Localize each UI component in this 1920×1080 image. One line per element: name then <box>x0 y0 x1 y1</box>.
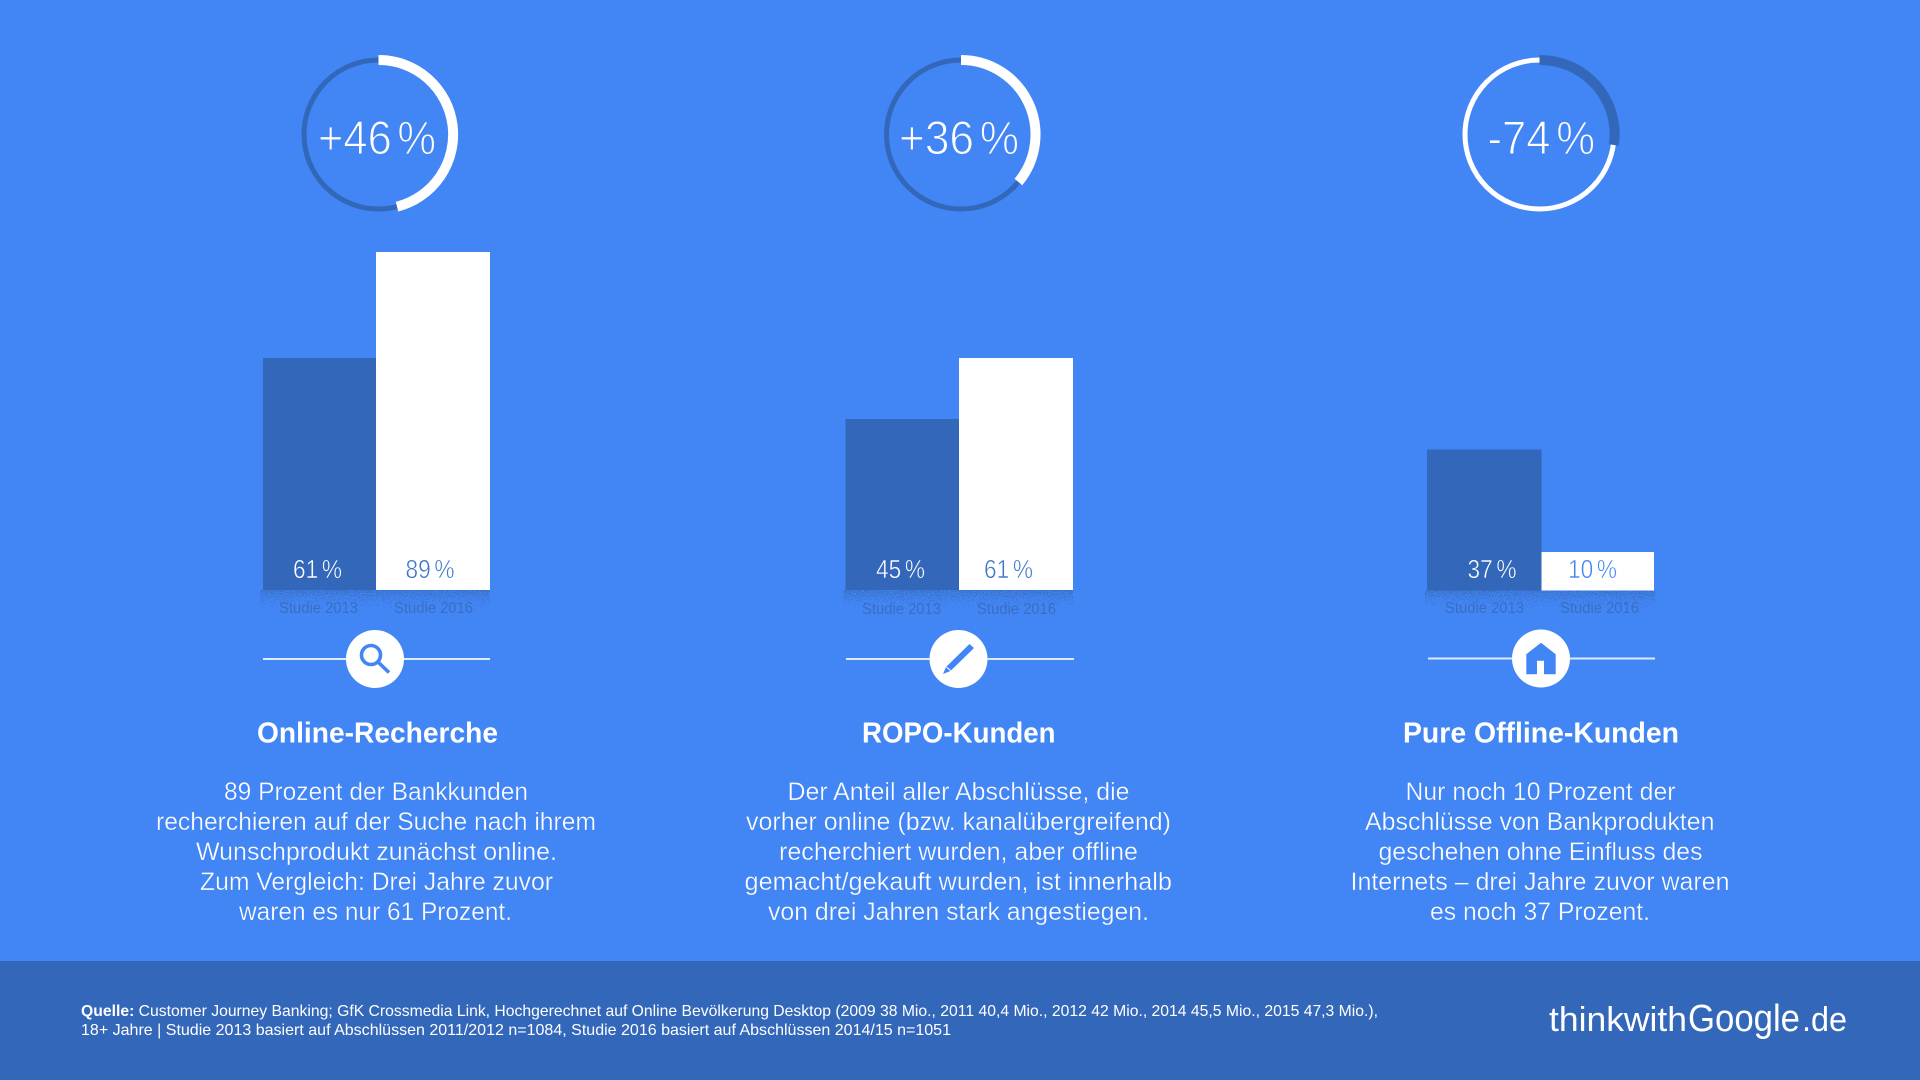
bar chart: Pure Offline-Kunden: 10 % <box>1568 556 1617 584</box>
source note <box>81 1003 1378 1039</box>
bar chart: Pure Offline-Kunden: 37 % <box>1468 556 1516 584</box>
footer band <box>0 961 1920 1080</box>
bar chart: ROPO-Kunden: 61 % <box>984 556 1033 584</box>
ring: +36 %: +36 % <box>899 111 1019 164</box>
text block: Online-Recherche: Wunschprodukt zunächst online. <box>196 838 557 866</box>
bar chart: Online-Recherche: 61 % <box>293 556 342 584</box>
text block: ROPO-Kunden: Der Anteil aller Abschlüsse, die <box>788 778 1130 806</box>
icon: house <box>1428 630 1655 688</box>
panel: Online-Recherche <box>156 60 596 926</box>
bar chart: Online-Recherche <box>260 252 490 617</box>
heading: Pure Offline-Kunden: Pure Offline-Kunden <box>1403 718 1679 750</box>
bar chart: ROPO-Kunden: 45 % <box>876 556 925 584</box>
bar chart: Pure Offline-Kunden: Studie 2016 <box>1560 600 1639 617</box>
heading: ROPO-Kunden: ROPO-Kunden <box>862 718 1056 750</box>
bar chart: Pure Offline-Kunden <box>1425 450 1655 617</box>
ring: -74 % <box>1465 60 1615 209</box>
bar chart: ROPO-Kunden: Studie 2016 <box>977 601 1056 618</box>
logo: thinkwithGoogle.de: Google <box>1688 998 1800 1040</box>
ring: +46 %: +46 % <box>318 111 436 164</box>
text block: Pure Offline-Kunden: Nur noch 10 Prozent der <box>1406 778 1676 806</box>
ring: +46 % <box>304 60 453 209</box>
text block: Online-Recherche: 89 Prozent der Bankkunden <box>224 778 528 806</box>
source note: Quelle: Customer Journey Banking; GfK Crossmedia Link, Hochgerechnet auf Online Bevölkerung Desktop (2009 38 Mio., 2011 40,4 Mio., 2012 42 Mio., 2014 45,5 Mio., 2015 47,3 Mio.), <box>81 1003 1378 1020</box>
bar chart: ROPO-Kunden <box>843 358 1073 618</box>
text block: ROPO-Kunden: recherchiert wurden, aber offline <box>779 838 1138 866</box>
text block: Pure Offline-Kunden: Internets – drei Jahre zuvor waren <box>1350 868 1730 896</box>
bar chart: ROPO-Kunden: Studie 2013 <box>862 601 941 618</box>
ring: -74 %: -74 % <box>1488 111 1595 164</box>
heading: Online-Recherche: Online-Recherche <box>257 718 498 750</box>
bar chart: Pure Offline-Kunden: Studie 2013 <box>1445 600 1524 617</box>
text block: Pure Offline-Kunden: geschehen ohne Einfluss des <box>1378 838 1702 866</box>
panel: Pure Offline-Kunden <box>1350 60 1730 926</box>
source note: 18+ Jahre | Studie 2013 basiert auf Abschlüssen 2011/2012 n=1084, Studie 2016 basiert auf Abschlüssen 2014/15 n=1051 <box>81 1022 951 1039</box>
text block: Online-Recherche: recherchieren auf der Suche nach ihrem <box>156 808 596 836</box>
text block: Online-Recherche: waren es nur 61 Prozent. <box>238 898 512 926</box>
text block: ROPO-Kunden: vorher online (bzw. kanalübergreifend) <box>746 808 1171 836</box>
text block: Pure Offline-Kunden: es noch 37 Prozent. <box>1430 898 1650 926</box>
text block: ROPO-Kunden: von drei Jahren stark angestiegen. <box>768 898 1149 926</box>
text block: Pure Offline-Kunden <box>1350 778 1730 926</box>
icon: pencil <box>846 630 1074 688</box>
logo: thinkwithGoogle.de: .de <box>1802 1001 1847 1039</box>
bar chart: Online-Recherche: Studie 2013 <box>279 600 358 617</box>
text block: Pure Offline-Kunden: Abschlüsse von Bankprodukten <box>1365 808 1714 836</box>
bar chart: Online-Recherche: 89 % <box>406 556 454 584</box>
ring: +36 % <box>886 60 1036 209</box>
icon: magnifier <box>263 630 490 688</box>
text block: Online-Recherche: Zum Vergleich: Drei Jahre zuvor <box>200 868 553 896</box>
panel: ROPO-Kunden <box>744 60 1172 926</box>
logo: thinkwithGoogle.de <box>1549 998 1847 1040</box>
text block: ROPO-Kunden: gemacht/gekauft wurden, ist innerhalb <box>744 868 1172 896</box>
text block: ROPO-Kunden <box>744 778 1172 926</box>
text block: Online-Recherche <box>156 778 596 926</box>
bar chart: Online-Recherche: Studie 2016 <box>394 600 473 617</box>
logo: thinkwithGoogle.de: thinkwith <box>1549 1001 1687 1039</box>
